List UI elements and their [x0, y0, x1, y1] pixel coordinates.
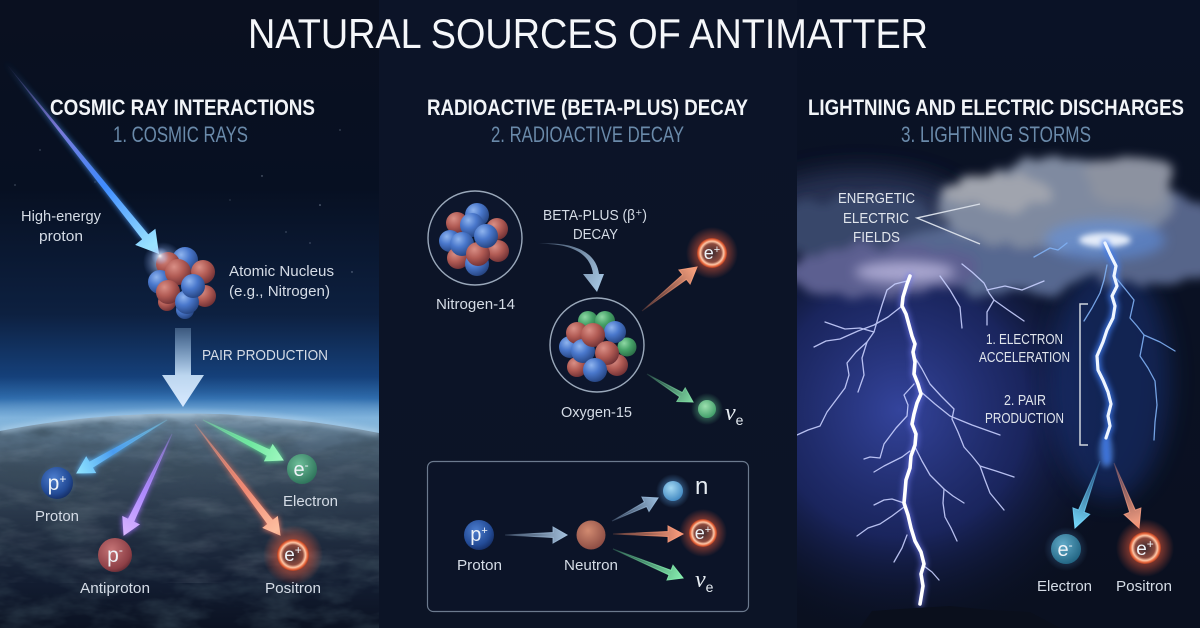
ground silhouette: [870, 606, 967, 618]
label: high-energy proton: High-energy: [21, 208, 101, 225]
panel: proton to neutron inset: [428, 462, 748, 612]
lightning bolt: right: [1034, 243, 1175, 468]
icon: positron: e: [704, 243, 714, 263]
lightning bolt: left: [797, 264, 1044, 604]
label: proton: Proton: [35, 508, 79, 525]
icon: neutrino: e: [736, 412, 744, 428]
label: neutrino: ν: [695, 567, 706, 593]
icon: neutrino: ν: [725, 400, 736, 426]
icon: antiproton particle: p: [107, 544, 119, 567]
arrow: to electron: [203, 420, 283, 461]
label: high-energy proton: [21, 208, 101, 245]
arrow: to electron: [1073, 461, 1100, 528]
icon: positron: +: [1147, 537, 1154, 551]
label: positron: Positron: [265, 580, 321, 597]
icon: positron: [686, 227, 738, 279]
icon: proton particle: +: [59, 472, 66, 486]
icon: neutron: [576, 520, 606, 550]
arrow: pair production: [162, 328, 204, 407]
icon: atomic nucleus: [143, 242, 216, 319]
label: beta-plus decay: BETA-PLUS (β⁺): [543, 207, 647, 224]
bracket with process steps: PRODUCTION: [985, 410, 1064, 427]
icon: electron: -: [1069, 538, 1073, 552]
bracket with process steps: ACCELERATION: [979, 349, 1070, 366]
arrow: proton to neutron: [505, 527, 567, 543]
icon: electron: e: [1057, 539, 1069, 561]
arrow: to positron: [195, 424, 280, 535]
storm cloud: [750, 156, 1200, 298]
icon: positron: e: [1136, 539, 1147, 560]
icon: oxygen-15 nucleus: [550, 298, 644, 392]
icon: antiproton particle: [98, 538, 132, 572]
label: neutron: Neutron: [564, 557, 618, 574]
arrow: to proton: [77, 420, 167, 473]
icon: proton: p: [470, 524, 481, 546]
heading: lightning: 3. LIGHTNING STORMS: [901, 122, 1091, 147]
label: positron: Positron: [1116, 578, 1172, 595]
icon: positron particle: [263, 525, 323, 585]
heading: radioactive decay: 2. RADIOACTIVE DECAY: [491, 122, 684, 147]
heading: lightning: [808, 95, 1184, 147]
icon: positron particle: e: [284, 545, 295, 566]
label: proton: Proton: [457, 557, 502, 574]
bracket with process steps: 2. PAIR: [1004, 392, 1046, 409]
icon: electron: [1046, 529, 1086, 569]
label: pair production: PAIR PRODUCTION: [202, 347, 328, 364]
icon: nitrogen-14 nucleus: [428, 191, 522, 285]
heading: radioactive decay: RADIOACTIVE (BETA-PLUS) DECAY: [427, 95, 748, 120]
arrow: to positron: [1114, 463, 1141, 528]
title: NATURAL SOURCES OF ANTIMATTER: [248, 10, 928, 57]
arrow: decay curve: [537, 243, 604, 292]
label: atomic nucleus: (e.g., Nitrogen): [229, 283, 330, 300]
icon: electron particle: -: [305, 458, 309, 472]
label: electron: Electron: [1037, 578, 1092, 595]
icon: positron: e: [695, 523, 705, 543]
heading: cosmic ray interactions: COSMIC RAY INTERACTIONS: [50, 95, 315, 120]
label: atomic nucleus: [229, 263, 334, 300]
icon: proton particle: p: [48, 472, 59, 495]
icon: antiproton particle: -: [119, 543, 123, 557]
icon: electron particle: [287, 454, 317, 484]
icon: positron: [1116, 519, 1174, 577]
panel: radioactive decay: [379, 0, 797, 628]
label: nitrogen-14: Nitrogen-14: [436, 296, 515, 313]
callout: energetic electric fields: [838, 190, 980, 246]
bracket with process steps: 1. ELECTRON: [986, 331, 1063, 348]
icon: proton particle: [40, 466, 74, 500]
icon: positron particle: +: [295, 543, 302, 557]
icon: n particle: [656, 473, 708, 508]
heading: cosmic ray interactions: 1. COSMIC RAYS: [113, 122, 248, 147]
arrow: to antiproton: [123, 434, 172, 535]
label: neutrino: e: [706, 579, 714, 595]
bracket with process steps: [979, 304, 1088, 445]
icon: electron particle: e: [293, 459, 305, 481]
icon: positron: +: [705, 524, 711, 536]
label: electron: Electron: [283, 493, 338, 510]
label: high-energy proton: proton: [39, 228, 83, 245]
heading: radioactive decay: [427, 95, 748, 147]
icon: neutrino: [691, 393, 744, 428]
arrow: to positron: [613, 526, 683, 542]
label: antiproton: Antiproton: [80, 580, 150, 597]
arrow: to n: [612, 497, 658, 521]
icon: positron: +: [714, 244, 720, 256]
callout: energetic electric fields: ENERGETIC: [838, 190, 915, 207]
callout: energetic electric fields: ELECTRIC: [843, 210, 909, 227]
arrow: cosmic ray proton: [5, 62, 159, 254]
panel: lightning and electric discharges: [797, 148, 1200, 608]
label: oxygen-15: Oxygen-15: [561, 404, 632, 421]
heading: cosmic ray interactions: [50, 95, 315, 147]
arrow: to neutrino: [613, 549, 683, 580]
label: atomic nucleus: Atomic Nucleus: [229, 263, 334, 280]
icon: positron: [679, 509, 727, 557]
arrow: to neutrino: [647, 374, 693, 402]
icon: proton: [464, 520, 494, 550]
arrow: to positron: [642, 267, 697, 311]
label: beta-plus decay: DECAY: [573, 226, 618, 243]
icon: n particle: n: [695, 473, 708, 500]
label: beta-plus decay: [543, 207, 647, 243]
icon: proton: +: [481, 525, 488, 537]
callout: energetic electric fields: FIELDS: [853, 229, 900, 246]
panel: cosmic ray interactions: [0, 67, 379, 628]
